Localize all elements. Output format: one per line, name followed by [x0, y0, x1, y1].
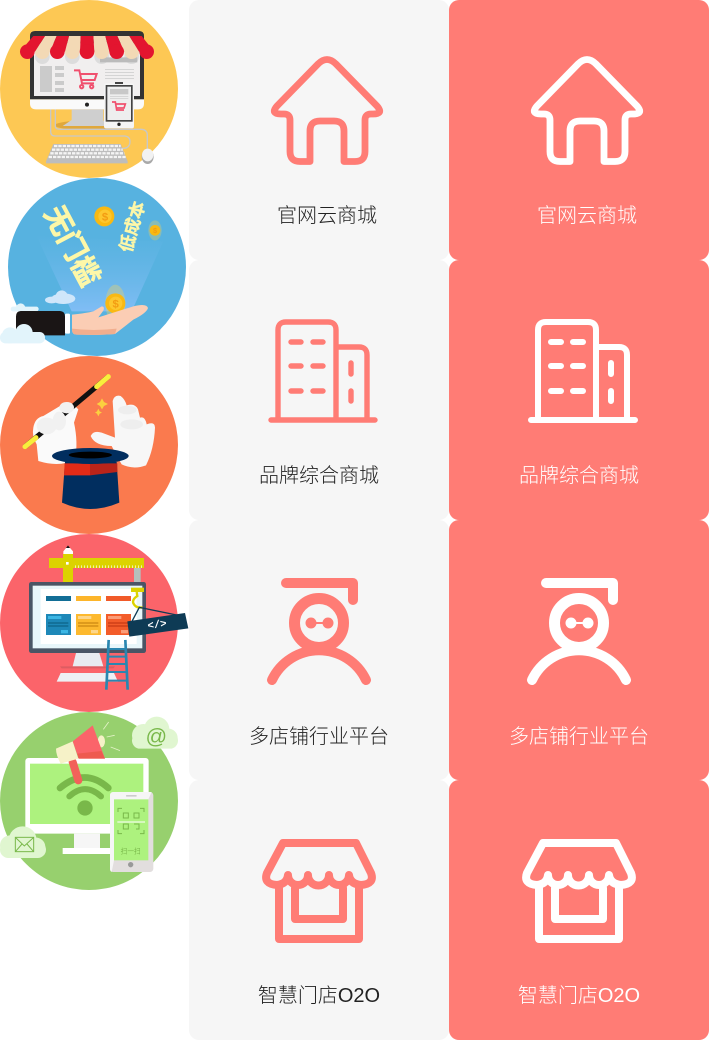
panel: official site mall (coral) — [449, 0, 709, 260]
illustration: website builder monitor with crane — [0, 534, 188, 712]
illustration: wifi marketing monitor: 扫一扫 — [121, 846, 141, 855]
panel: brand mall (grey) — [189, 260, 449, 520]
label: 智慧门店O2O — [518, 984, 640, 1007]
label: 官网云商城 — [537, 204, 637, 227]
panel: brand mall (coral) — [449, 260, 709, 520]
illustration: low cost hand with coins — [0, 178, 186, 356]
label: 智慧门店O2O — [258, 984, 380, 1007]
illustration: wifi marketing monitor — [0, 712, 178, 890]
illustration: low cost hand with coins: $ — [113, 298, 120, 310]
panel: multi-store platform (coral) — [449, 520, 709, 780]
icon: house — [534, 60, 640, 162]
illustration: website builder monitor with crane: </> — [147, 618, 168, 633]
panel: smart store O2O (grey) — [189, 780, 449, 1040]
icon: storefront — [526, 843, 632, 939]
label: 官网云商城 — [277, 204, 377, 227]
panel: multi-store platform (grey) — [189, 520, 449, 780]
illustration: low cost hand with coins: $ — [102, 211, 109, 223]
icon: person — [272, 583, 366, 680]
icon: house — [274, 60, 380, 162]
label: 品牌综合商城 — [519, 464, 639, 487]
label: 多店铺行业平台 — [509, 725, 649, 748]
illustration: low cost hand with coins: 无门槛 — [37, 201, 106, 292]
illustration: low cost hand with coins: 低成本 — [116, 199, 149, 254]
icon: person — [532, 583, 626, 680]
illustration: online shop computer — [0, 0, 178, 178]
illustration: low cost hand with coins: $ — [153, 226, 157, 235]
icon: buildings — [271, 322, 375, 420]
icon: buildings — [531, 322, 635, 420]
label: 多店铺行业平台 — [249, 725, 389, 748]
illustration: wifi marketing monitor: @ — [146, 725, 167, 749]
label: 品牌综合商城 — [259, 464, 379, 487]
panel: smart store O2O (coral) — [449, 780, 709, 1040]
illustration: magic hat and wand — [0, 356, 178, 534]
panel: official site mall (grey) — [189, 0, 449, 260]
icon: storefront — [266, 843, 372, 939]
